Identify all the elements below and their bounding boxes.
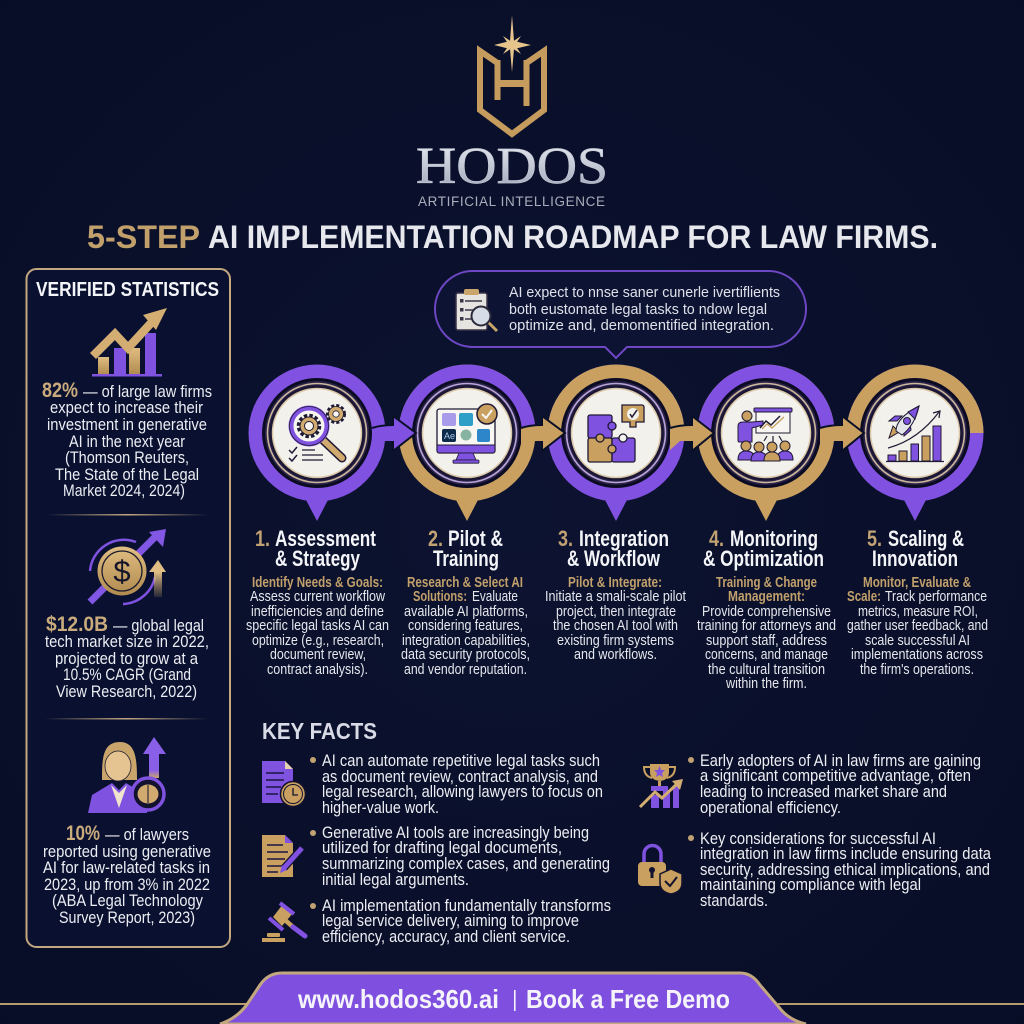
step 2 text: Solutions: (413, 588, 467, 605)
fact: service delivery: legal service delivery, aiming to improve (322, 912, 579, 930)
fact: generative AI tools: Generative AI tools are increasingly being (322, 824, 589, 842)
step 3 badge (548, 364, 684, 521)
logo: Hodos shield and wordmark (416, 15, 608, 209)
footer call to action (297, 984, 730, 1014)
step 2 badge (398, 364, 536, 521)
fact: early adopters: leading to increased market share and (700, 783, 947, 801)
icon: rocket and rising bars (886, 406, 944, 462)
icon: shield with H monogram (480, 51, 544, 134)
step 4 text: concerns, and manage (705, 646, 828, 663)
fact: early adopters: Early adopters of AI in law firms are gaining (700, 752, 981, 770)
stat: 82%: The State of the Legal (55, 466, 199, 484)
stat: 10%: 2023, up from 3% in 2022 (44, 876, 210, 894)
title: AI IMPLEMENTATION ROADMAP FOR LAW FIRMS. (208, 219, 938, 255)
step 4 text: within the firm. (725, 675, 807, 692)
stat: $12.0B: projected to grow at a (55, 650, 199, 668)
step 5 text (847, 526, 988, 678)
stat: 82%: 82% (42, 379, 78, 402)
fact: generative AI tools (310, 824, 610, 889)
fact: service delivery: AI implementation fundamentally transforms (322, 897, 611, 915)
tagline: ARTIFICIAL INTELLIGENCE (418, 194, 605, 209)
step 2 text: Pilot & (448, 526, 503, 551)
title: 5-STEP (87, 219, 200, 255)
stat: 82%: Market 2024, 2024) (63, 482, 185, 500)
step 4 text: 4. (709, 526, 724, 551)
icon: dollar coin with growth arrows: $ (113, 554, 131, 589)
step 1 badge (248, 364, 386, 521)
icon: trophy with growth arrow (640, 764, 683, 808)
fact: service delivery (310, 897, 611, 946)
stat: 10%: — of lawyers (105, 826, 189, 844)
fact: key considerations: standards. (700, 892, 768, 910)
callout (435, 271, 806, 358)
step 4 text: training for attorneys and (697, 617, 836, 634)
step 4 badge (698, 364, 834, 521)
step 1 text: Assessment (275, 526, 377, 551)
arrow: step 4 to 5 (820, 416, 864, 451)
step 3 text: the chosen AI tool with (553, 617, 678, 634)
step 3 text: existing firm systems (557, 632, 674, 649)
fact: key considerations: security, addressing ethical implications, and (700, 861, 990, 879)
step 2 text: data security protocols, (401, 646, 530, 663)
panel: verified statistics (26, 269, 230, 947)
step 1 text: 1. (255, 526, 270, 551)
icon: padlock with shield (638, 846, 682, 894)
stat: 82%: investment in generative (47, 416, 207, 434)
step 1 text: Assess current workflow (250, 588, 385, 605)
footer call to action: www.hodos360.ai (297, 984, 499, 1014)
step 5 text: Scale: (847, 588, 881, 605)
stat: 10%: Survey Report, 2023) (59, 909, 195, 927)
callout text: AI expect to nnse saner cunerle ivertiflients (509, 284, 780, 301)
step 4 text: & Optimization (703, 546, 824, 571)
step 4 text: support staff, address (706, 632, 827, 649)
step 5 text: gather user feedback, and (847, 617, 988, 634)
step 3 text (545, 526, 687, 663)
fact: key considerations (688, 830, 992, 910)
stat: 82%: (Thomson Reuters, (65, 449, 189, 467)
step 5 text: implementations across (851, 646, 983, 663)
icon: presenter with audience (738, 408, 793, 461)
icon: document with pen (262, 835, 302, 877)
icon: document with clock (262, 761, 306, 806)
fact: generative AI tools: summarizing complex cases, and generating (322, 855, 610, 873)
fact: service delivery: efficiency, accuracy, and client service. (322, 928, 570, 946)
icon: puzzle pieces (588, 405, 644, 462)
fact: early adopters (688, 752, 981, 817)
fact: generative AI tools: initial legal arguments. (322, 871, 469, 889)
step 3 text: Initiate a smali-scale pilot (545, 588, 687, 605)
step 5 text: scale successful AI (865, 632, 970, 649)
step 5 text: the firm's operations. (860, 661, 974, 678)
step 5 text: Monitor, Evaluate & (863, 574, 971, 591)
step 1 text: inefficiencies and define (251, 603, 384, 620)
stat: 82%: expect to increase their (50, 399, 203, 417)
step 1 text: document review, (270, 646, 366, 663)
step 3 text: & Workflow (567, 546, 661, 571)
step 4 text: Provide comprehensive (702, 603, 831, 620)
key facts heading: KEY FACTS (262, 718, 377, 744)
arrow: step 2 to 3 (521, 416, 565, 451)
step 4 text: Management: (728, 588, 805, 605)
fact: early adopters: operational efficiency. (700, 799, 841, 817)
step 1 text: specific legal tasks AI can (246, 617, 389, 634)
step 2 text: Training (433, 546, 499, 571)
step 3 text: Pilot & Integrate: (568, 574, 662, 591)
fact: generative AI tools: utilized for drafting legal documents, (322, 839, 562, 857)
step 2 text: 2. (428, 526, 443, 551)
fact: automation: higher-value work. (322, 799, 439, 817)
fact: key considerations: Key considerations for successful AI (700, 830, 936, 848)
stat: 10%: AI for law-related tasks in (43, 859, 210, 877)
step 2 text: and vendor reputation. (404, 661, 527, 678)
step 3 text: 3. (558, 526, 573, 551)
icon: clipboard with magnifier (456, 289, 497, 331)
stat: 82%: AI in the next year (69, 433, 185, 451)
fact: automation: AI can automate repetitive legal tasks such (322, 752, 600, 770)
icon: monitor with app tiles (437, 404, 497, 463)
step 3 text: Integration (579, 526, 669, 551)
icon: magnifier with gears (289, 406, 344, 461)
step 5 text: 5. (867, 526, 882, 551)
fact: automation (310, 752, 603, 817)
fact: automation: legal research, allowing lawyers to focus on (322, 783, 603, 801)
step 4 text: Monitoring (730, 526, 818, 551)
icon: star above shield (494, 15, 531, 72)
icon: gavel (262, 903, 305, 942)
arrow: step 1 to 2 (372, 416, 416, 451)
callout text: both eustomate legal tasks to ndow legal (509, 301, 767, 318)
icon: lawyer with brain and arrow (88, 737, 166, 813)
stat: $12.0B: $12.0B (46, 613, 108, 636)
step 5 text: metrics, measure ROI, (858, 603, 978, 620)
step 1 text: & Strategy (275, 546, 361, 571)
step 5 text: Track performance (885, 588, 987, 605)
arrow: step 3 to 4 (670, 416, 714, 451)
stat: $12.0B: 10.5% CAGR (Grand (63, 666, 191, 684)
step 4 text: the cultural transition (708, 661, 825, 678)
stat: $12.0B (45, 613, 209, 701)
footer call to action: Book a Free Demo (526, 984, 730, 1014)
step 1 text: Identify Needs & Goals: (252, 574, 383, 591)
step 2 text: considering features, (408, 617, 523, 634)
icon: dollar coin with growth arrows (90, 529, 166, 604)
callout text (509, 284, 780, 334)
fact: key considerations: integration in law firms include ensuring data (700, 845, 992, 863)
step 3 text: and workflows. (574, 646, 657, 663)
fact: key considerations: maintaining compliance with legal (700, 876, 921, 894)
step 5 text: Scaling & (888, 526, 964, 551)
panel heading: VERIFIED STATISTICS (36, 279, 219, 301)
step 1 text (246, 526, 389, 678)
stat: $12.0B: — global legal (113, 617, 204, 635)
stat: $12.0B: View Research, 2022) (56, 683, 197, 701)
fact: early adopters: a significant competitive advantage, often (700, 767, 971, 785)
step 1 text: contract analysis). (267, 661, 368, 678)
footer banner (0, 973, 1024, 1024)
stat: 10%: 10% (66, 822, 100, 845)
step 2 text (401, 526, 530, 678)
step 2 text: Evaluate (472, 588, 518, 605)
icon: rising bar chart (92, 308, 167, 376)
step 4 text (697, 526, 836, 692)
stat: 10%: (ABA Legal Technology (52, 892, 204, 910)
step 4 text: Training & Change (716, 574, 817, 591)
icon: monitor with app tiles: Ae (444, 431, 455, 441)
step 3 text: project, then integrate (556, 603, 676, 620)
step 2 text: integration capabilities, (402, 632, 530, 649)
fact: automation: as document review, contract analysis, and (322, 768, 598, 786)
stat: $12.0B: tech market size in 2022, (45, 633, 209, 651)
callout text: optimize and, demomentified integration. (509, 317, 774, 334)
step 5 badge (846, 364, 984, 521)
stat: 82%: — of large law firms (83, 383, 212, 401)
step 5 text: Innovation (872, 546, 958, 571)
stat: 82% (42, 379, 212, 500)
step 2 text: available AI platforms, (404, 603, 528, 620)
wordmark: HODOS (416, 138, 608, 195)
step 2 text: Research & Select AI (407, 574, 523, 591)
step 1 text: optimize (e.g., research, (252, 632, 384, 649)
stat: 10% (43, 822, 211, 927)
stat: 10%: reported using generative (43, 843, 211, 861)
